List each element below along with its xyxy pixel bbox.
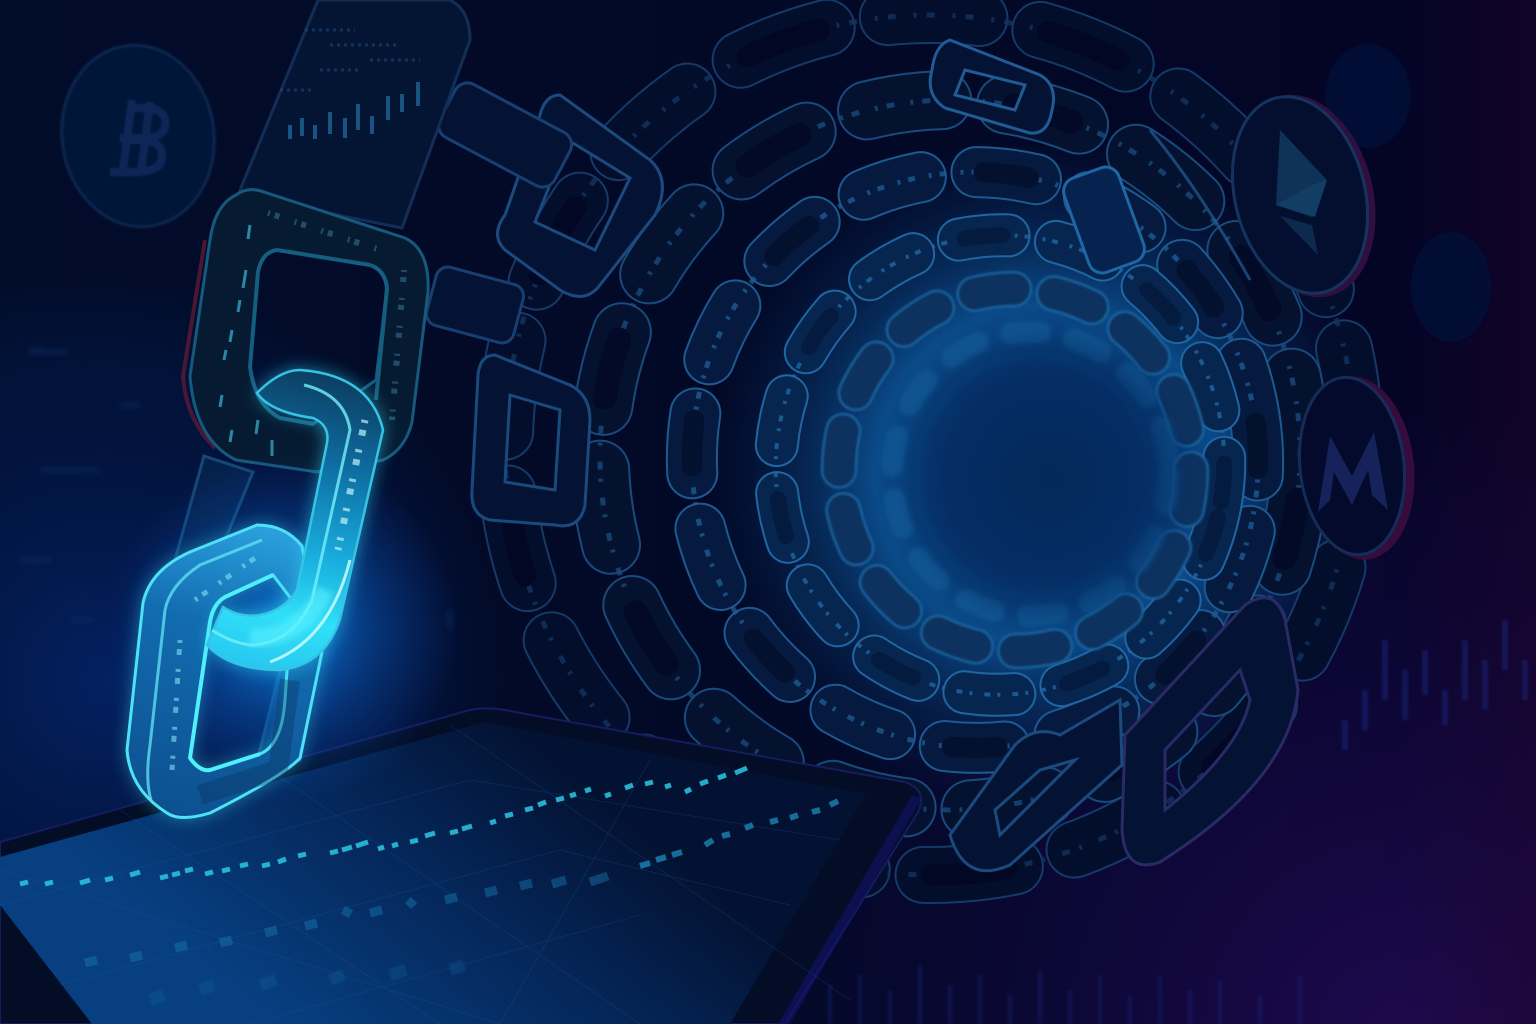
ring 1 outer <box>476 0 1384 904</box>
tunnel: chain rings <box>476 0 1384 904</box>
link mid left <box>472 355 590 526</box>
link bridge upper <box>434 78 576 192</box>
chain <box>70 0 500 840</box>
tablet screen <box>0 722 866 1024</box>
candlesticks on panel <box>290 82 418 139</box>
link: upper dark panel <box>238 0 470 228</box>
link mid <box>1060 163 1148 277</box>
candles row 3 <box>85 876 608 963</box>
tunnel center <box>890 320 1210 640</box>
link curve upper right <box>1150 130 1250 280</box>
coin: ethereum <box>1213 80 1396 312</box>
coin: monero <box>1291 371 1423 565</box>
ring 5 <box>839 289 1191 651</box>
link upper left <box>498 95 662 296</box>
ring 6 <box>892 332 1168 616</box>
link: upper glowing hook <box>207 370 383 670</box>
ring 3 <box>650 131 1300 789</box>
link bridge lower <box>424 264 526 346</box>
link top <box>930 40 1054 133</box>
tunnel glow <box>650 100 1430 860</box>
grid lines <box>0 725 850 1024</box>
ring 4 <box>733 193 1267 737</box>
link: dark link <box>183 190 428 472</box>
coins: faint distant <box>1325 44 1491 342</box>
candles row 4 <box>150 965 464 1000</box>
data ticks on dark link <box>220 225 272 456</box>
glow behind links <box>70 440 500 840</box>
faint background charts <box>20 350 1525 1024</box>
candles row 1 <box>20 768 747 884</box>
link: rear lower strand <box>175 456 322 770</box>
tablet <box>0 708 922 1024</box>
ring 2 <box>565 65 1335 845</box>
link bottom right <box>1122 598 1298 865</box>
tablet side edge <box>778 795 922 1024</box>
link: lower glowing link <box>127 525 322 818</box>
coin: bitcoin <box>50 35 226 237</box>
link bottom <box>950 700 1122 871</box>
candles row 2 <box>640 801 838 866</box>
tunnel: individual links <box>424 40 1298 871</box>
tablet body <box>0 708 921 1024</box>
